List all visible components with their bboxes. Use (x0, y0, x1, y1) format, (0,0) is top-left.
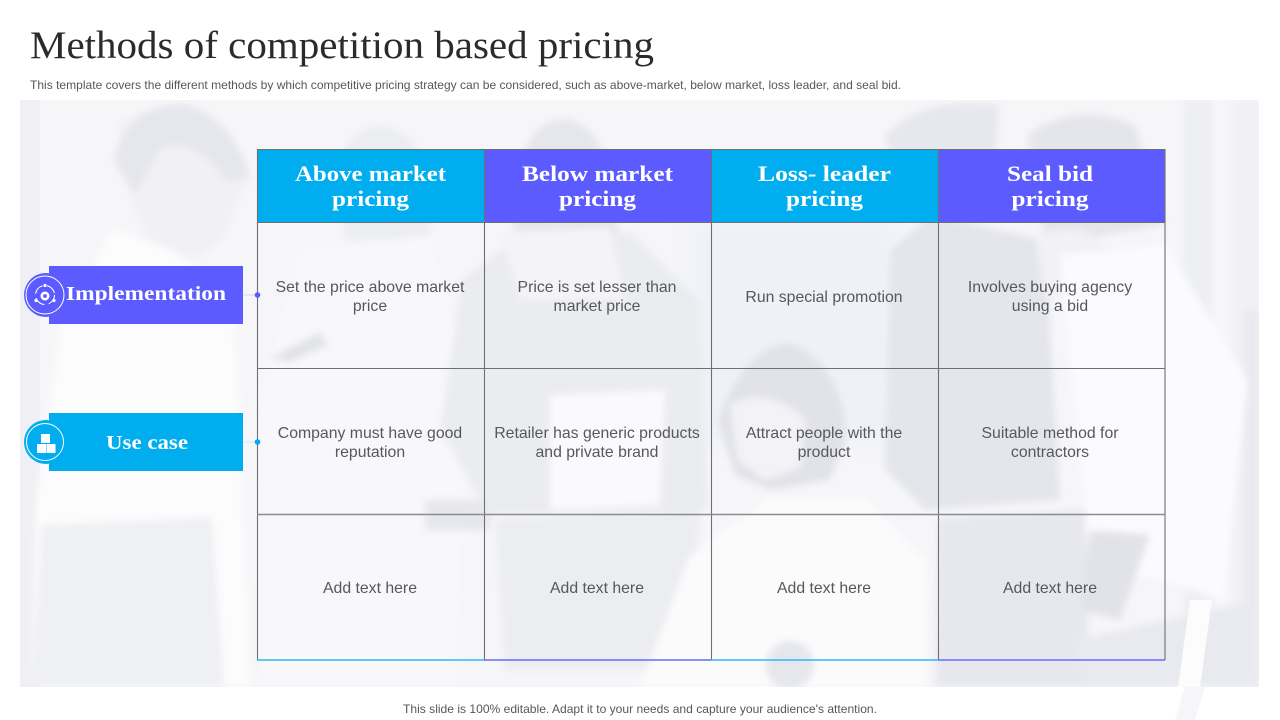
row 2: use case cells: Company must have good (278, 425, 462, 442)
header: above market pricing: pricing (332, 186, 409, 211)
header: seal bid pricing: Seal bid (1007, 161, 1093, 186)
row 1: implementation cells: market price (554, 298, 641, 315)
row 2: use case cells: product (798, 444, 851, 461)
background photo: team of colleagues, washed out (20, 100, 1260, 689)
row label: implementation: Implementation (66, 283, 226, 305)
header: above market pricing (257, 149, 484, 222)
row 1: implementation cells: price (353, 298, 387, 315)
header: below market pricing (484, 149, 711, 222)
row 2: use case cells: Attract people with the (746, 425, 902, 442)
header: loss leader pricing: pricing (786, 186, 863, 211)
dark man (886, 104, 999, 149)
row 2: use case cells: contractors (1011, 444, 1089, 461)
header: loss leader pricing: Loss- leader (758, 161, 891, 186)
row 2: use case cells: and private brand (536, 444, 658, 461)
row 3: placeholder cells: Add text here (323, 580, 417, 597)
row 1: implementation cells: Set the price above market (276, 279, 465, 296)
row 2: use case cells (278, 425, 1118, 461)
header: below market pricing: Below market (522, 161, 674, 186)
row label: use case: Use case (106, 432, 188, 454)
table grid lines (257, 149, 1165, 660)
subtitle: This template covers the different methods by which competitive pricing strategy can be considered, such as above-market, below market, loss leader, and seal bid. (30, 78, 901, 92)
seated woman (718, 343, 846, 490)
row label: implementation (24, 266, 260, 324)
icon: gear with cycle arrows (34, 284, 56, 304)
icon: stacked blocks (37, 434, 56, 453)
row 3: placeholder cells: Add text here (777, 580, 871, 597)
header: seal bid pricing (938, 149, 1165, 222)
row 2: use case cells: Suitable method for (982, 425, 1118, 442)
row 3: placeholder cells: Add text here (550, 580, 644, 597)
middle woman (346, 130, 426, 238)
left man (31, 274, 58, 546)
footer note: This slide is 100% editable. Adapt it to your needs and capture your audience's attention. (403, 702, 877, 716)
row 1: implementation cells: using a bid (1012, 298, 1088, 315)
right man (1028, 115, 1165, 245)
row 1: implementation cells: Run special promotion (745, 289, 903, 306)
pricing table (257, 149, 1165, 660)
row 1: implementation cells (276, 279, 1132, 315)
title: Methods of competition based pricing (30, 24, 654, 67)
row 3: placeholder cells: Add text here (1003, 580, 1097, 597)
woman with papers (514, 120, 618, 231)
header: loss leader pricing (711, 149, 938, 222)
row label: use case (24, 413, 260, 471)
row 2: use case cells: Retailer has generic products (494, 425, 700, 442)
row 2: use case cells: reputation (335, 444, 405, 461)
row 3: placeholder cells (323, 580, 1097, 597)
header: below market pricing: pricing (559, 186, 636, 211)
header: above market pricing: Above market (295, 161, 447, 186)
white strip decoration at bottom right (1175, 687, 1205, 720)
row 1: implementation cells: Involves buying agency (968, 279, 1132, 296)
header: seal bid pricing: pricing (1012, 186, 1088, 211)
row 1: implementation cells: Price is set lesser than (518, 279, 676, 296)
